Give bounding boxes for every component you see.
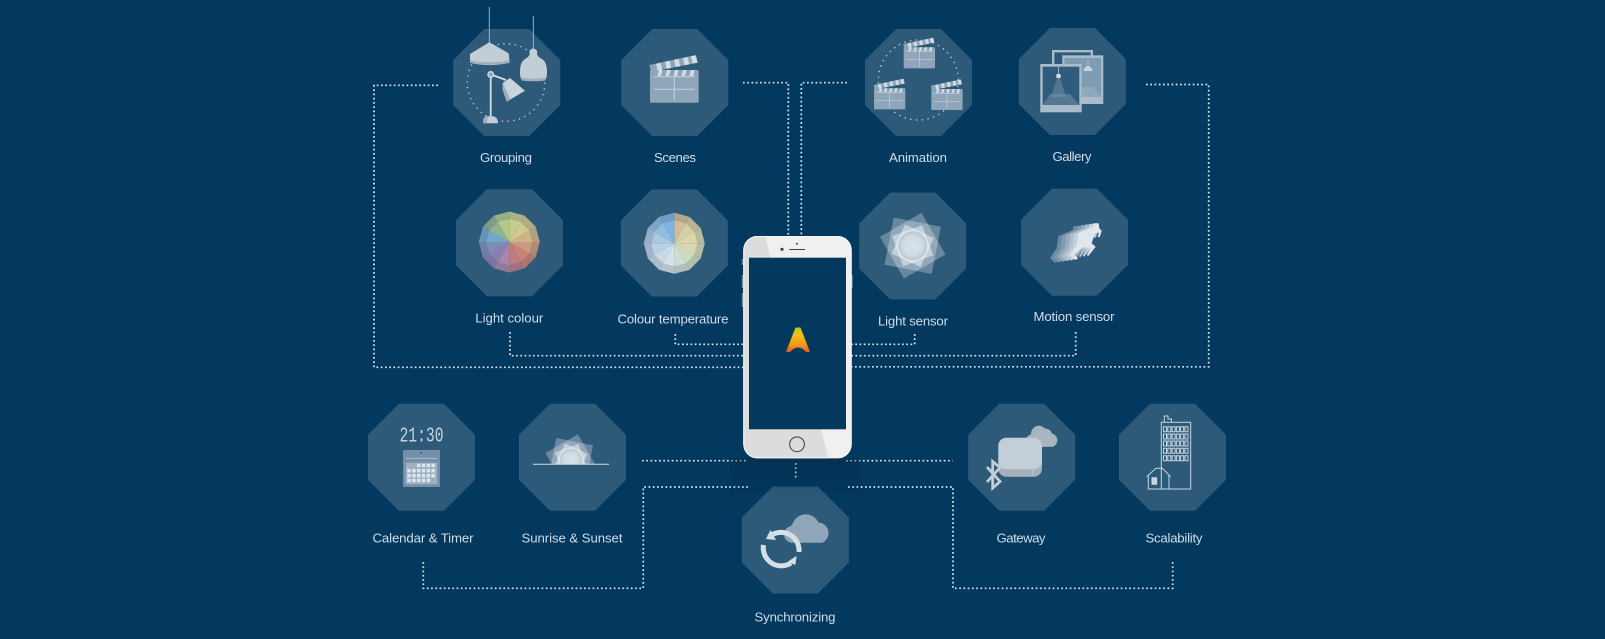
- panel: Colour temperature: [618, 190, 728, 326]
- side buttons: [742, 259, 852, 307]
- label: Calendar & Timer: Calendar & Timer: [372, 530, 474, 545]
- label: Grouping: Grouping: [480, 150, 532, 165]
- panel: Grouping: [453, 7, 560, 165]
- icon: colour wheel: [475, 208, 543, 276]
- panel: Motion sensor: [1021, 189, 1128, 324]
- label: Scalability: Scalability: [1146, 530, 1203, 545]
- connectors: dotted wiring to phone: [374, 83, 1209, 588]
- icon: lamps: [467, 7, 547, 123]
- panel: Gateway: [968, 404, 1075, 545]
- label: Synchronizing: Synchronizing: [754, 610, 836, 625]
- home button: [790, 437, 804, 452]
- panel: Gallery: [1019, 28, 1126, 164]
- icon: photo frames: [1040, 51, 1103, 112]
- icon: rising sun: [533, 434, 609, 465]
- phone screen: [749, 258, 846, 429]
- panel: Light colour: [456, 189, 563, 326]
- panel: Light sensor: [859, 192, 966, 328]
- label: Scenes: Scenes: [654, 150, 696, 165]
- icon: cloud sync: [763, 514, 829, 566]
- logo: [786, 328, 810, 352]
- icon: sun burst: [880, 213, 945, 278]
- icon: running figure: [1050, 223, 1102, 263]
- icon: clapperboard: [649, 55, 699, 103]
- label: Gallery: Gallery: [1052, 149, 1092, 164]
- label: Colour temperature: Colour temperature: [618, 311, 728, 326]
- panel: Animation: [865, 29, 972, 165]
- label: Motion sensor: Motion sensor: [1034, 309, 1115, 324]
- icon: three clapperboards: [874, 38, 963, 120]
- icon: calendar: [403, 450, 440, 487]
- earpiece and camera: [780, 243, 805, 251]
- panel: Scalability: [1119, 404, 1226, 545]
- icon: temperature wheel: [640, 209, 708, 277]
- label: Gateway: Gateway: [996, 530, 1046, 545]
- icon: building and house: [1147, 416, 1191, 489]
- label: Sunrise & Sunset: Sunrise & Sunset: [522, 530, 623, 545]
- phone shadow: [730, 458, 860, 500]
- icon: gateway with cloud and bluetooth: [987, 426, 1057, 488]
- icon: digital clock: 21:30: [399, 425, 444, 448]
- phone body: [743, 236, 852, 458]
- panel: Calendar & Timer: [368, 404, 475, 545]
- phone: [742, 236, 852, 458]
- label: Light sensor: Light sensor: [878, 313, 949, 328]
- panel: Sunrise & Sunset: [519, 404, 626, 545]
- panel: Synchronizing: [730, 458, 860, 625]
- label: Animation: Animation: [889, 150, 947, 165]
- panel: Scenes: [621, 29, 728, 165]
- label: Light colour: Light colour: [475, 311, 544, 326]
